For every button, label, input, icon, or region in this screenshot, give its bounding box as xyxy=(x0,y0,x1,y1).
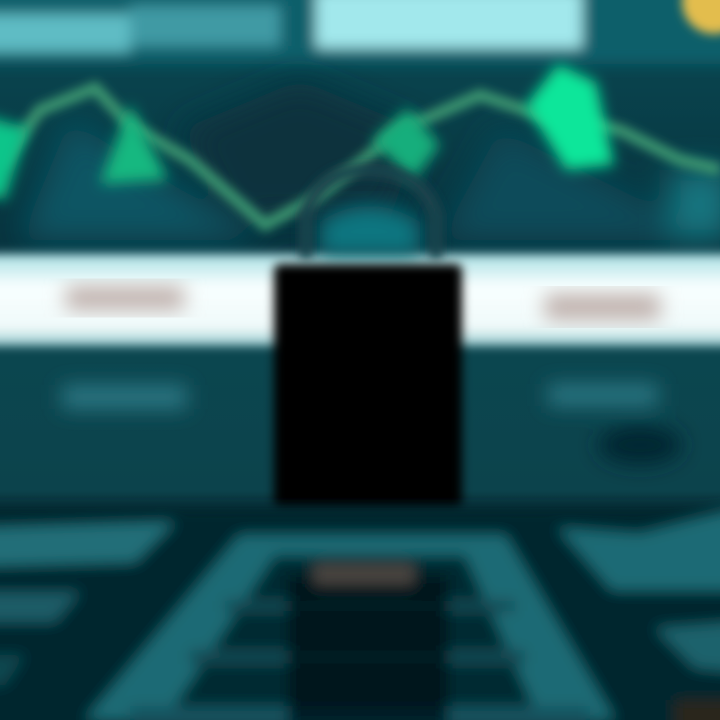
left title bar second part xyxy=(130,6,280,46)
bottom keyboard scene xyxy=(0,508,720,720)
key right top xyxy=(558,508,720,590)
right edge glow xyxy=(670,170,720,240)
green peak right xyxy=(526,64,614,170)
band label right xyxy=(545,294,660,320)
green peak second xyxy=(100,104,168,184)
centre black shaft xyxy=(288,575,448,720)
mountain right xyxy=(440,130,720,240)
left title bar xyxy=(0,14,130,52)
header band backdrop xyxy=(0,0,720,64)
key left middle xyxy=(0,592,80,622)
mountain left xyxy=(20,120,260,240)
header banner xyxy=(0,0,720,64)
lower dark smudge xyxy=(598,425,682,465)
bottom dark base xyxy=(0,508,720,720)
central platform dark xyxy=(165,555,540,720)
padlock xyxy=(274,170,462,508)
chart backdrop: dark mountains xyxy=(20,80,720,240)
key right low xyxy=(655,622,720,672)
mountain centre xyxy=(180,80,420,220)
central platform outline xyxy=(85,535,615,720)
green line chart xyxy=(0,88,720,225)
platform rung lower xyxy=(190,650,525,664)
trend line xyxy=(0,88,720,225)
lower teal labels xyxy=(62,384,682,465)
band label left xyxy=(66,286,184,310)
lower label left xyxy=(62,385,187,409)
right title bar xyxy=(316,0,582,48)
key left top xyxy=(0,522,175,566)
shackle opening xyxy=(320,206,420,255)
platform rung bottom xyxy=(130,706,590,720)
bottom right brown corner xyxy=(675,700,720,720)
lock body xyxy=(274,264,462,508)
brown label xyxy=(314,564,414,584)
white label band xyxy=(0,254,720,346)
lower label right xyxy=(548,384,658,406)
green peak centre xyxy=(372,108,440,182)
icon: sun xyxy=(682,0,720,34)
platform rung upper xyxy=(225,600,515,612)
key left low xyxy=(0,655,25,685)
shackle xyxy=(306,170,436,258)
green peak left xyxy=(0,115,28,200)
